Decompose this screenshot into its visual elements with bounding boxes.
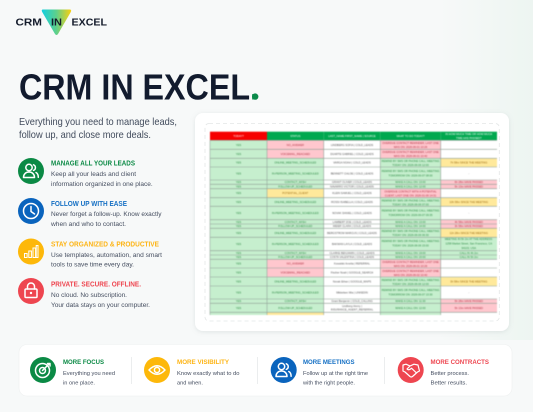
logo: CRM [16,16,42,28]
column: what to do today: REMIND BY SMS OR PHONE CALL; MEETING [382,159,439,163]
column: name and source: BENNETT CHLOE | COLD_LEADS [331,171,373,175]
feature: manage all your leads [18,158,153,188]
column: name and source: GRANT OLIVER | COLD_LEADS [332,180,372,184]
column: name and source: CLARKE BENJAMIN | COLD_LEADS [329,251,375,255]
column: what to do today: WAS ON: 2026-06-02 10:40 [394,273,428,277]
column: what to do today: TODAY ON: 2026-06-06 15:00 [392,244,429,248]
table header [210,132,497,140]
column: name and source: NAVARRO VICTOR | COLD_LEADS [330,184,374,188]
column: name and source: Lindberg Henry | [342,304,362,308]
column: name and source: BAKMAN LAYLA | COLD_LEADS [332,242,372,246]
column: today: YES [236,262,241,266]
column: time passed: - [468,212,469,215]
column: status: VOICEMAIL_REACHED [281,270,310,274]
benefit: more contracts: Better results. [430,380,467,386]
column: today: YES [236,270,241,274]
column: today: YES [236,184,241,188]
benefit: more visibility: and when. [177,380,203,386]
column: name and source: NOVAK DANIEL | COLD_LEADS [332,211,372,215]
column: status: CONTACT_WISH [285,299,306,303]
column: status: FOLLOW-UP_SCHEDULED [278,255,312,259]
column: status: FOLLOW-UP_SCHEDULED [278,224,312,228]
column: today: YES [236,191,241,195]
column: name and source: MEIER CLARA | COLD_LEADS [333,224,371,228]
icon: handshake [398,357,424,383]
feature: private: Your data stays on your computer. [51,302,150,309]
column: what to do today: REMIND BY SMS OR PHONE CALL; MEETING [382,239,439,243]
column: what to do today: OVERDUE CONTACT REMINDER, LAST ONE [382,141,439,145]
column: status: ONLINE_MEETING_SCHEDULED [274,231,316,235]
column: time passed: 11h 28m SINCE THE MEETING [450,231,488,235]
column: name and source: LINDBERG SOFIA | COLD_LEADS [331,143,373,147]
column: today: YES [236,171,241,175]
feature: stay organized [18,238,162,268]
column: today: YES [236,211,241,215]
icon: lock [18,278,44,304]
column: status: VOICEMAIL_REACHED [281,152,310,156]
column: today: YES [236,242,241,246]
column: what to do today: WAS ON: 2026-06-01 10:26 [394,145,428,149]
column: name and source: Grant Benjamin | COLD_CALLING [331,299,373,303]
icon: eye [144,357,170,383]
subtitle [19,117,177,141]
column: name and source: DUARTE GABRIEL | COLD_LEADS [330,152,374,156]
subtitle: follow up, and close more deals. [19,130,151,141]
table header: WHAT TO DO TODAY? [396,134,425,138]
feature: private [18,278,150,309]
column: what to do today: WAS ON: 2026-06-01 10:40 [394,154,428,158]
column: name and source: KLEIN SAMUEL | COLD_LEADS [332,191,372,195]
column: what to do today: MAKE A CALL ON: 13:00 [395,220,426,224]
column: what to do today: MAKE A CALL ON: 14:00 [395,224,426,228]
column: time passed: CALL IN 4h 2m [460,251,479,255]
column: today: YES [236,200,241,204]
column: status: POTENTIAL_CLIENT [282,191,309,195]
column: what to do today: TODAY ON: 2026-06-06 07:00 [392,202,429,206]
column: today: YES [236,251,241,255]
column: time passed: 5h 13m HAVE PASSED [455,306,483,310]
title: CRM IN EXCEL. [19,66,259,107]
logo: EXCEL [72,16,108,28]
column: what to do today: REMIND BY SMS OR PHONE CALL; MEETING [382,208,439,212]
feature: private: PRIVATE. SECURE. OFFLINE. [51,282,141,288]
column: what to do today: REMIND BY SMS OR PHONE CALL; MEETING [382,198,439,202]
benefit: more contracts [398,357,489,386]
column: time passed [445,161,493,310]
logo [16,10,108,35]
column: what to do today: TODAY ON: 2026-06-06 06:30 [392,233,429,237]
benefit: more focus [30,357,115,386]
icon: target [30,357,56,383]
column: name and source: Novak Ethan | GOOGLE_MAPS [333,280,371,284]
column: time passed: 1258 Market Street, San Francisco, CA [445,242,492,246]
column: what to do today: REMIND BY SMS OR PHONE CALL; MEETING [382,169,439,173]
column: status: CONTACT_WISH [285,251,306,255]
column: name and source: Fischer Noah | GOOGLE_SEARCH [331,270,373,274]
spreadsheet table [210,132,497,315]
table column backgrounds [210,140,497,315]
column: today: YES [236,152,241,156]
table grid lines [210,140,497,315]
column: today: YES [236,280,241,284]
table header: STATUS [290,134,301,138]
column: name and source: BERGSTROM MARCUS | COLD_LEADS [327,231,377,235]
column: what to do today: MAKE A CALL ON: 13:00 [395,180,426,184]
table header: TODAY? [233,134,244,138]
column: status: FOLLOW-UP_SCHEDULED [278,306,312,310]
column: name and source: ROSSI ISABELLA | COLD_LEADS [331,200,373,204]
column: what to do today: MAKE A CALL ON: 12:00 [395,184,426,188]
panel: spreadsheet card [195,113,509,331]
benefit: more meetings: with the right people. [302,380,355,386]
column: today: YES [236,143,241,147]
column: name and source: VARGA NOAH | COLD_LEADS [333,161,371,165]
feature: follow up with ease [18,198,162,228]
column: time passed: CALL IN 5h 2m [460,255,479,259]
benefit: more contracts: MORE CONTRACTS [430,359,489,366]
benefit: more visibility [144,357,240,386]
icon: people [271,357,297,383]
column: what to do today: OVERDUE CONTACT REMINDER, LAST ONE [382,269,439,273]
column: today: YES [236,255,241,259]
benefit: more meetings: MORE MEETINGS [303,359,354,366]
column: what to do today: TODAY ON: 2026-06-06 12:00 [392,163,429,167]
column: name and source: LAMBERT ZOE | COLD_LEADS [333,220,372,224]
benefit: more contracts: Better process. [430,371,469,377]
benefit: more visibility: Know exactly what to do [177,371,240,377]
column: status: NO_ANSWER [287,143,304,147]
column: what to do today: MAKE A CALL ON: 20:00 [395,255,426,259]
feature: private: No cloud. No subscription. [51,292,127,299]
subtitle: Everything you need to manage leads, [19,117,177,128]
column: name and source: INSURANCE_AGENT_REFERRAL [331,308,374,312]
column: status: ONLINE_MEETING_SCHEDULED [274,161,316,165]
column: today: YES [236,220,241,224]
column: what to do today [382,141,439,310]
column: time passed: 4h 58m HAVE PASSED [455,220,483,224]
feature: stay organized: tools to save time every day. [51,262,134,268]
table header: LAST_NAME FIRST_NAME | SOURCE [328,134,376,138]
feature: manage all your leads: information organized in one place. [51,181,153,188]
column: today: YES [236,299,241,303]
column: time passed: 94103, USA [462,246,476,250]
logo: IN [51,16,62,28]
icon: bar chart [18,238,44,264]
column: today [236,143,241,310]
column: status: ONLINE_MEETING_SCHEDULED [274,200,316,204]
column: what to do today: MAKE A CALL ON: 11:30 [395,299,426,303]
column: today: YES [236,161,241,165]
column: status: IN-PERSON_MEETING_SCHEDULED [272,211,319,215]
table header: TIME HAS PASSED? [456,136,482,140]
column: what to do today: REMIND BY SMS OR PHONE CALL; MEETING [382,229,439,233]
column: what to do today: WAS ON: 2026-06-01 10:26 [394,264,428,268]
column: name and source: Kowalski Amelia | REFERRAL [334,262,370,266]
column: status [272,143,319,310]
column: status: IN-PERSON_MEETING_SCHEDULED [272,171,319,175]
column: time passed: 5h 13m HAVE PASSED [455,184,483,188]
panel: benefits bar [19,344,512,396]
feature: manage all your leads: Keep all your leads and client [51,171,136,178]
benefit: more meetings: Follow up at the right time [303,371,368,377]
feature: follow up with ease: FOLLOW UP WITH EASE [51,201,127,208]
column: status: NO_ANSWER [287,262,304,266]
column: what to do today: CLIENT, LAST ONE ON: 2026-01-06 14:31 [385,194,437,198]
column: status: IN-PERSON_MEETING_SCHEDULED [272,290,319,294]
icon: clock [18,198,44,224]
column: time passed: 3h 58m SINCE THE MEETING [450,280,487,284]
column: time passed: 10h 58m SINCE THE MEETING [450,200,488,204]
column: today: YES [236,290,241,294]
feature: follow up with ease: Never forget a follow-up. Know exactly [51,211,162,218]
column: today: YES [236,231,241,235]
column: today: YES [236,180,241,184]
column: what to do today: MAKE A CALL ON: 19:00 [395,251,426,255]
feature: follow up with ease: when and who to contact. [50,221,126,228]
table header: IN HOW MUCH TIME OR HOW MUCH [445,132,492,136]
column: name and source [327,143,377,312]
column: status: ONLINE_MEETING_SCHEDULED [274,280,316,284]
column: status: FOLLOW-UP_SCHEDULED [278,184,312,188]
column: status: CONTACT_WISH [285,220,306,224]
column: time passed: MEETING IN 5h 2m AT THE ADDRESS: [445,237,493,241]
column: today: YES [236,224,241,228]
column: time passed: - [468,292,469,294]
column: time passed: 6h 28m HAVE PASSED [455,180,483,184]
column: today: YES [236,306,241,310]
column: time passed: 5h 28m HAVE PASSED [455,299,483,303]
column: what to do today: MAKE A CALL ON: 12:00 [395,306,426,310]
column: status: IN-PERSON_MEETING_SCHEDULED [272,242,319,246]
column: what to do today: OVERDUE CONTACT REMINDER, LAST ONE [382,150,439,154]
feature: stay organized: STAY ORGANIZED & PRODUCTIVE [51,242,159,248]
column: time passed: 3h 58m HAVE PASSED [455,224,483,228]
benefit: more meetings [271,357,368,386]
benefit: more focus: Everything you need [63,371,115,377]
benefit: more focus: MORE FOCUS [63,359,104,366]
column: status: CONTACT_WISH [285,180,306,184]
feature: manage all your leads: MANAGE ALL YOUR LEADS [51,160,135,168]
icon: people [18,158,44,184]
benefit: more focus: in one place. [63,380,95,386]
benefit: more visibility: MORE VISIBILITY [177,359,230,366]
column: name and source: COSTA VALENTINA | COLD_LEADS [330,255,374,259]
column: what to do today: TODAY ON: 2026-06-06 12:00 [392,282,429,286]
column: what to do today: TOMORROW ON: 2026-06-07 13:30 [388,292,433,296]
column: what to do today: REMIND BY SMS OR PHONE CALL; MEETING [382,278,439,282]
column: what to do today: OVERDUE CONTACT WITH A POTENTIAL [384,190,437,194]
column: time passed: - [468,172,469,175]
feature: stay organized: Use templates, automation, and smart [51,252,162,259]
column: what to do today: OVERDUE CONTACT REMINDER, LAST ONE [382,260,439,264]
column: what to do today: TOMORROW ON: 2026-06-07 09:35 [388,213,433,217]
column: name and source: Mikkelsen Mia | LINKEDIN [336,290,368,294]
column: what to do today: TOMORROW ON: 2026-06-07 08:00 [388,174,433,178]
column: time passed: 7h 58m SINCE THE MEETING [450,161,487,165]
column: what to do today: REMIND BY SMS OR PHONE CALL; MEETING [382,288,439,292]
